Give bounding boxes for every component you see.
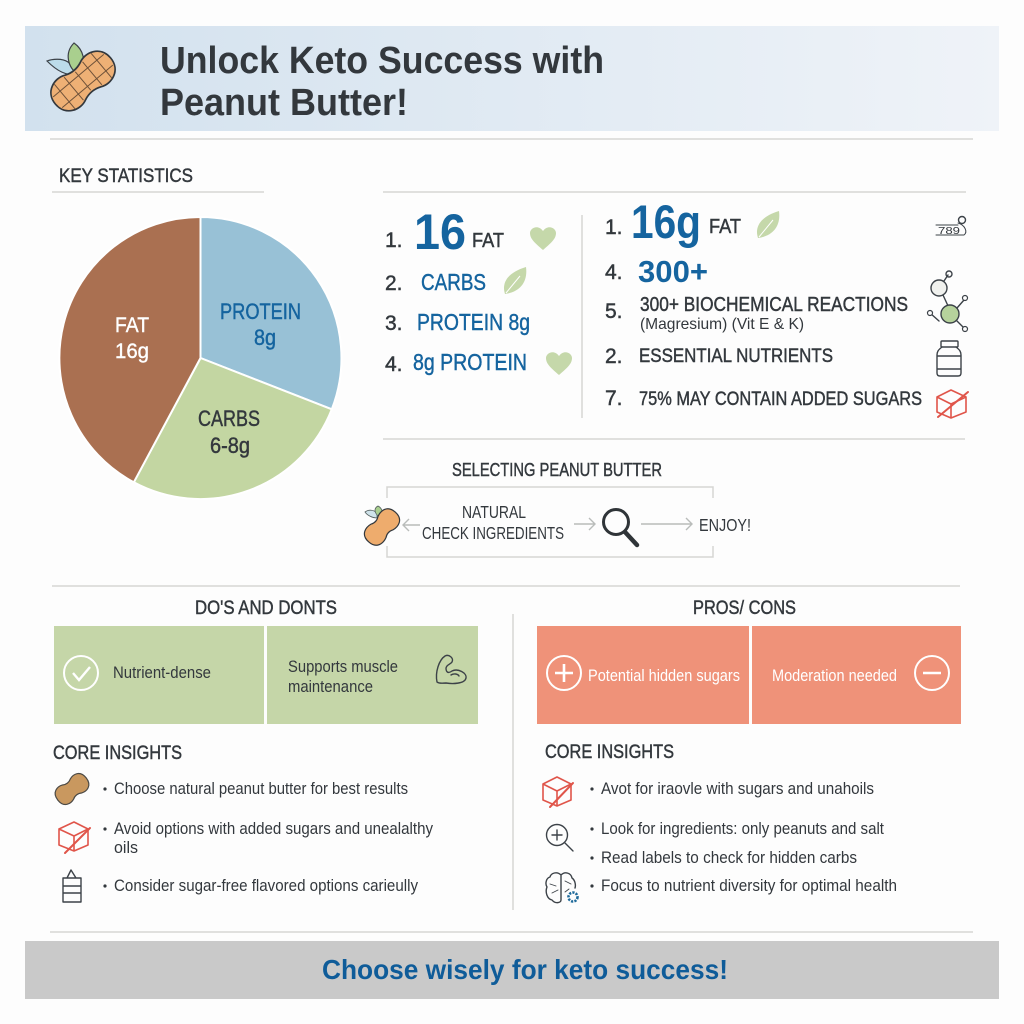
stats list: right column: 2. [605, 345, 623, 368]
pie chart: CARBS [198, 406, 260, 431]
panel: core insights left: oils [114, 839, 138, 857]
icon: crossed box [543, 777, 573, 807]
icon: peanut [52, 770, 92, 808]
icon: jar [937, 341, 961, 376]
pie chart: PROTEIN [220, 299, 301, 324]
stats list: left column: PROTEIN 8g [417, 309, 530, 335]
flow: selecting peanut butter: NATURAL [462, 502, 526, 522]
panel: dos and donts: Supports muscle [288, 658, 398, 676]
panel: core insights right: CORE INSIGHTS [545, 741, 674, 763]
stats list: right column: 4. [605, 261, 623, 284]
panel: core insights right: Read labels to check for hidden carbs [601, 849, 857, 867]
title: Peanut Butter! [160, 82, 408, 124]
stats list: right column: 300+ BIOCHEMICAL REACTIONS [640, 293, 908, 316]
panel: core insights left: Choose natural peanut butter for best results [114, 780, 408, 798]
icon: heart [530, 227, 556, 250]
panel: dos and donts: maintenance [288, 678, 373, 696]
panel: core insights left: Consider sugar-free flavored options carieully [114, 877, 419, 895]
panel: pros and cons: PROS/ CONS [693, 597, 796, 619]
title: Unlock Keto Success with [160, 40, 604, 82]
flow: selecting peanut butter: SELECTING PEANUT BUTTER [452, 459, 662, 480]
panel: dos and donts: DO'S AND DONTS [195, 597, 337, 619]
stats list: left column: 2. [385, 272, 403, 295]
icon: magnifier [604, 510, 637, 545]
title [160, 40, 604, 124]
icon: leaf [504, 267, 526, 294]
panel: pros and cons [537, 597, 961, 724]
stats list: right column: 16g [631, 195, 701, 248]
icon: minus [915, 656, 949, 690]
stats list: right column: 75% MAY CONTAIN ADDED SUGARS [639, 388, 922, 410]
icon: molecule [928, 271, 968, 332]
stats list: right column: FAT [709, 216, 741, 238]
icon: peanut [361, 505, 403, 549]
panel: core insights right: Focus to nutrient diversity for optimal health [601, 877, 897, 895]
panel: pros and cons: Moderation needed [772, 667, 897, 685]
flow: selecting peanut butter: ENJOY! [699, 515, 751, 535]
flow: selecting peanut butter: CHECK INGREDIENTS [422, 523, 564, 543]
stats list: right column: 300+ [638, 254, 708, 289]
panel: core insights left: Avoid options with added sugars and unealalthy [114, 820, 434, 838]
icon: leaf [757, 211, 779, 238]
panel: pros and cons: Potential hidden sugars [588, 667, 740, 685]
footer banner: Choose wisely for keto success! [322, 954, 728, 985]
stats list: left column: 16 [414, 204, 466, 260]
icon: bottle [63, 870, 81, 902]
panel: core insights right: Look for ingredients: only peanuts and salt [601, 820, 884, 838]
panel: core insights left: CORE INSIGHTS [53, 742, 182, 764]
icon: zoom [546, 824, 573, 851]
icon: check [64, 656, 98, 690]
icon: brain and gear [546, 873, 578, 903]
panel: core insights left [52, 742, 434, 902]
arrow [403, 519, 420, 531]
stats list: left column: 8g PROTEIN [413, 349, 527, 375]
flow: selecting peanut butter [361, 459, 751, 557]
icon: scale note: 789 [938, 226, 961, 237]
stats list: right column [605, 195, 968, 418]
stats list: right column: (Magresium) (Vit E & K) [640, 316, 804, 333]
header banner [25, 26, 999, 131]
panel: core insights right [543, 741, 897, 903]
stats list: left column: 4. [385, 353, 403, 376]
stats list: left column: CARBS [421, 269, 486, 295]
stats list: left column: 1. [385, 229, 403, 252]
icon: muscle [436, 655, 466, 683]
stats list: right column: ESSENTIAL NUTRIENTS [639, 345, 833, 367]
icon: heart [546, 352, 572, 375]
icon: peanut with leaves [44, 43, 122, 118]
stats list: right column: 5. [605, 300, 623, 323]
panel: dos and donts [54, 597, 478, 724]
stats list: left column [385, 204, 572, 376]
stats list: left column: 3. [385, 312, 403, 335]
panel: dos and donts: Nutrient-dense [113, 664, 211, 682]
pie chart: 8g [254, 325, 276, 350]
footer banner [25, 941, 999, 999]
stats list: right column: 7. [605, 387, 623, 410]
pie chart: 16g [115, 340, 149, 363]
stats list: right column: 1. [605, 216, 623, 239]
arrow [574, 518, 595, 530]
icon: plus [547, 656, 581, 690]
arrow [641, 518, 692, 530]
icon: crossed box [937, 390, 968, 418]
heading: key statistics: KEY STATISTICS [59, 165, 193, 187]
pie chart: FAT [115, 314, 149, 337]
pie chart: 6-8g [210, 433, 250, 458]
pie chart [59, 217, 341, 499]
icon: scale note [936, 216, 966, 237]
stats list: left column: FAT [472, 230, 504, 252]
panel: core insights right: Avot for iraovle with sugars and unahoils [601, 780, 874, 798]
icon: crossed box [59, 822, 90, 853]
